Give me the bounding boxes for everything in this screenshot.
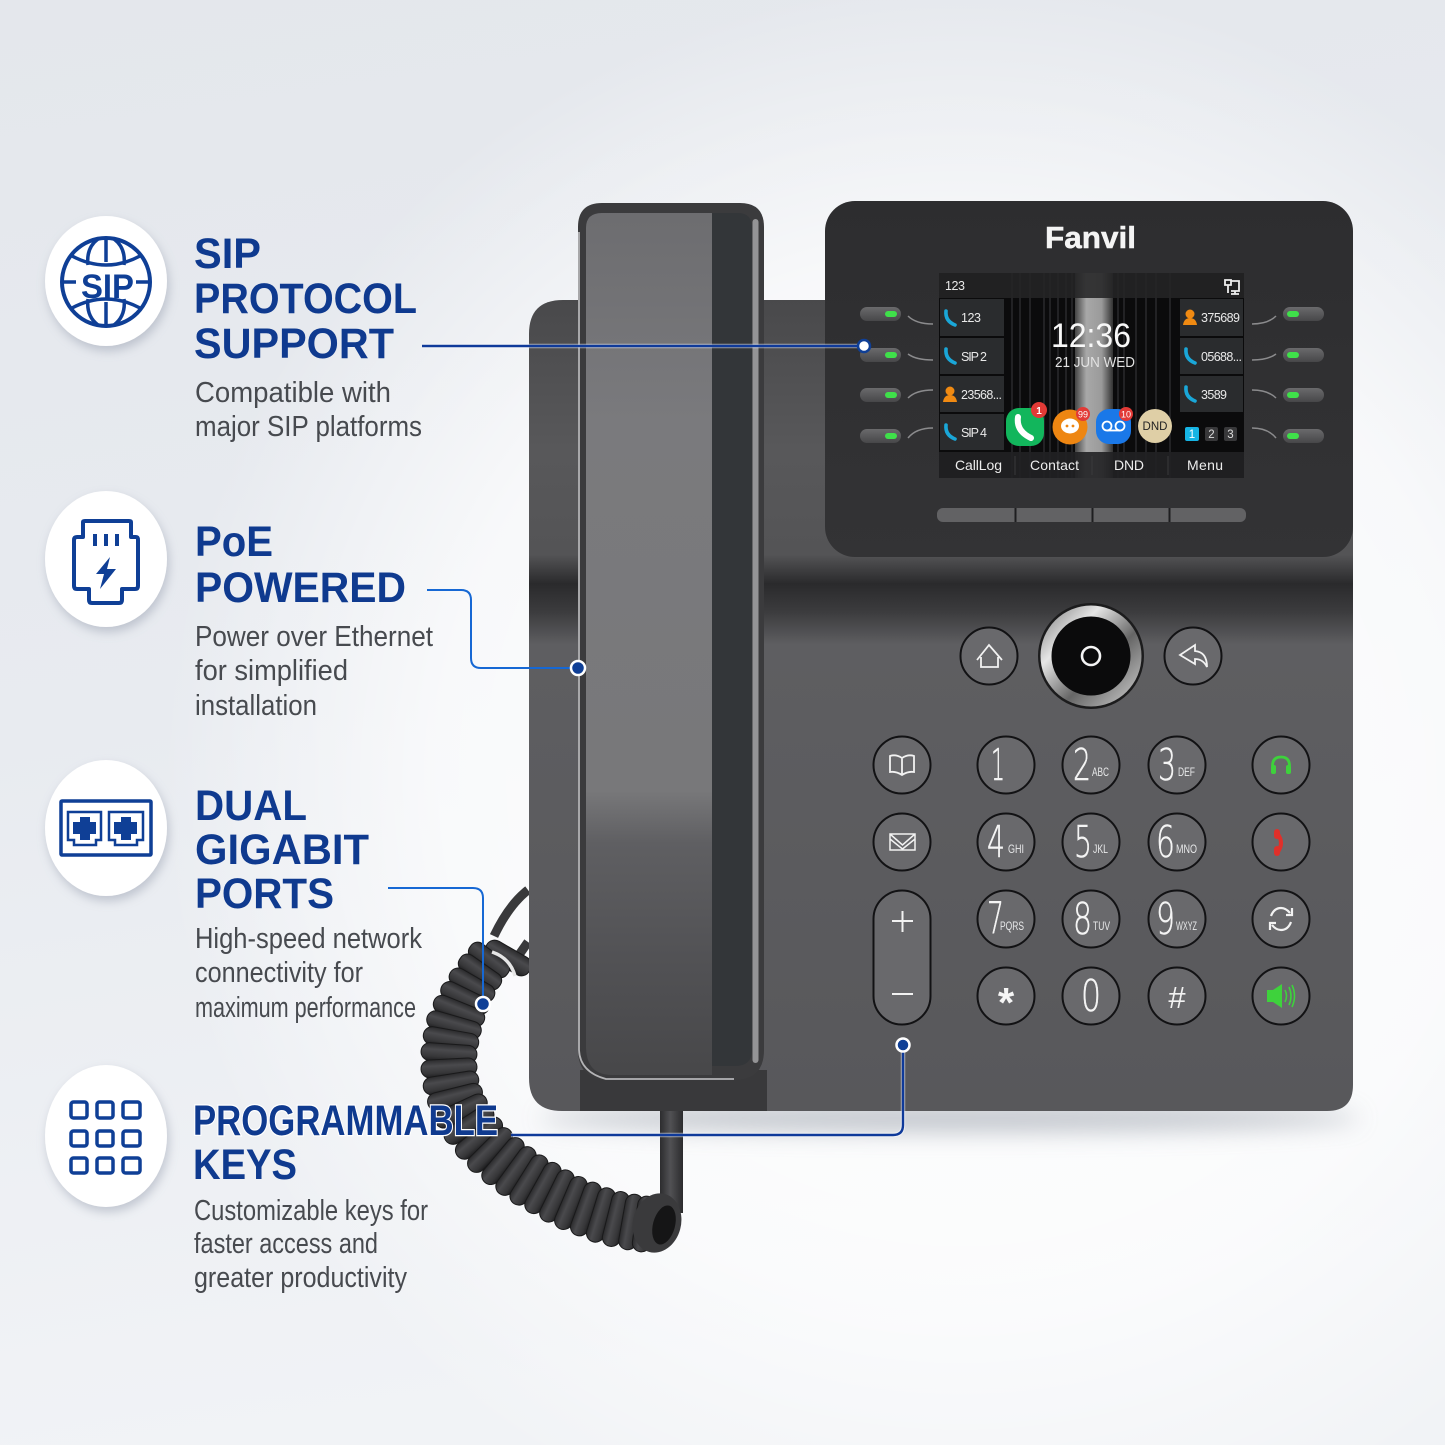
- description: for simplified: [195, 655, 348, 687]
- app icon: voicemail: 10: [1121, 410, 1131, 420]
- description: Customizable keys for: [194, 1195, 428, 1227]
- callout: SIP line: [422, 340, 870, 352]
- left speed-dial tiles: [940, 299, 1004, 450]
- app icon: messages: [1052, 407, 1090, 444]
- keypad digits: 2: [1073, 740, 1091, 791]
- page indicators: [1185, 427, 1237, 441]
- keypad digits: *: [998, 979, 1015, 1026]
- feature: dual gigabit ports: [195, 782, 422, 1024]
- soft key labels: DND: [1114, 457, 1144, 473]
- screen: 123: [945, 279, 965, 293]
- keypad digits: WXYZ: [1176, 919, 1197, 933]
- keypad digits: MNO: [1176, 842, 1197, 856]
- keypad digits: 6: [1156, 817, 1175, 868]
- keypad digits: GHI: [1008, 842, 1024, 856]
- description: [195, 377, 422, 443]
- coiled handset cord: [420, 890, 688, 1258]
- screen: [939, 273, 1244, 478]
- icon circle: keypad grid: [45, 1065, 167, 1207]
- left speed-dial tiles: 23568...: [961, 388, 1002, 402]
- phone shadow: [540, 1104, 1360, 1132]
- keypad digits: ABC: [1092, 765, 1109, 779]
- description: installation: [195, 690, 317, 722]
- icon: speaker: [1267, 984, 1294, 1008]
- icon: back: [1180, 645, 1207, 667]
- app icon: messages: 99: [1078, 410, 1088, 420]
- feature: SIP protocol support: [194, 230, 422, 443]
- keypad digits: DEF: [1178, 765, 1195, 779]
- icon circle: SIP globe: [45, 216, 167, 346]
- description: High-speed network: [195, 923, 422, 955]
- heading: GIGABIT: [195, 826, 369, 874]
- description: faster access and: [194, 1228, 378, 1260]
- keypad digits: #: [1168, 980, 1186, 1015]
- icon circle: dual ports: [45, 760, 167, 896]
- cradle shade under handset: [580, 1070, 767, 1111]
- head panel: [825, 201, 1353, 557]
- icon: book: [890, 755, 914, 775]
- brand logo: Fanvil: [1045, 220, 1136, 255]
- soft key labels: Menu: [1187, 457, 1223, 473]
- right speed-dial tiles: 375689: [1201, 311, 1240, 325]
- icon: volume plus and minus: [892, 911, 913, 994]
- right speed-dial tiles: 05688...: [1201, 350, 1242, 364]
- icon: redial: [1270, 908, 1292, 930]
- heading: PROTOCOL: [194, 275, 417, 323]
- app icon: DND: DND: [1143, 421, 1167, 433]
- heading: SIP: [194, 230, 261, 278]
- right speed-dial tiles: 3589: [1201, 388, 1227, 402]
- icon: hang up: [1274, 829, 1281, 856]
- app icon: DND: [1138, 409, 1172, 443]
- heading: DUAL: [195, 782, 307, 830]
- left speed-dial tiles: 123: [961, 311, 981, 325]
- icon circle: SIP globe: SIP: [81, 268, 134, 306]
- icon: headset: [1271, 757, 1291, 774]
- description: [195, 923, 422, 1024]
- keypad digits: 0: [1081, 971, 1101, 1022]
- heading: SUPPORT: [194, 320, 394, 368]
- heading: [194, 230, 417, 368]
- date: 21 JUN WED: [1055, 355, 1135, 371]
- base plate: [529, 300, 1353, 1111]
- left line keys: [860, 307, 933, 443]
- heading: [193, 1097, 498, 1189]
- description: greater productivity: [194, 1262, 407, 1294]
- left speed-dial tiles: SIP 2: [961, 350, 987, 364]
- app icon: phone: 1: [1036, 406, 1042, 417]
- keypad digits: 7: [987, 893, 1004, 944]
- keypad digits: 5: [1074, 817, 1092, 868]
- description: [195, 621, 433, 722]
- right line keys: [1252, 307, 1324, 443]
- page indicators: 3: [1227, 429, 1234, 441]
- keypad digits: TUV: [1093, 919, 1110, 933]
- icon circle: PoE connector: [45, 491, 167, 627]
- heading: [195, 518, 406, 612]
- soft key labels: CallLog: [955, 457, 1002, 473]
- page indicators: 2: [1208, 429, 1215, 441]
- keypad digits: 4: [987, 817, 1005, 868]
- soft key labels: Contact: [1030, 457, 1079, 473]
- app icon: phone: [1006, 402, 1047, 446]
- keypad digits: 1: [991, 740, 1005, 791]
- app icon: voicemail: [1096, 407, 1133, 444]
- description: major SIP platforms: [195, 411, 422, 443]
- feature: PoE powered: [195, 518, 433, 722]
- description: connectivity for: [195, 957, 363, 989]
- right speed-dial tiles: [1180, 299, 1243, 412]
- heading: PORTS: [195, 870, 334, 918]
- description: maximum performance: [195, 992, 416, 1024]
- soft key bar: [937, 508, 1246, 522]
- keypad digits: PQRS: [1000, 919, 1024, 933]
- navigation key: [1038, 603, 1144, 709]
- keypad: [874, 628, 1310, 1024]
- description: Power over Ethernet: [195, 621, 433, 653]
- soft key labels: [955, 456, 1223, 475]
- description: Compatible with: [195, 377, 391, 409]
- icon: home: [977, 645, 1002, 667]
- description: [194, 1195, 428, 1294]
- clock: 12:36: [1051, 317, 1131, 355]
- keypad digits: 9: [1156, 894, 1175, 945]
- heading: KEYS: [193, 1141, 297, 1189]
- feature: programmable keys: [193, 1097, 498, 1294]
- keypad digits: 8: [1073, 894, 1092, 945]
- heading: [195, 782, 369, 918]
- handset: [578, 203, 764, 1080]
- keypad digits: JKL: [1093, 842, 1108, 856]
- heading: PoE: [195, 518, 273, 566]
- keypad digits: 3: [1158, 740, 1176, 791]
- phone: [529, 201, 1353, 1111]
- page indicators: 1: [1189, 429, 1195, 441]
- callout: ports line: [388, 888, 490, 1011]
- heading: PROGRAMMABLE: [193, 1097, 498, 1145]
- callout: PoE line: [427, 590, 585, 675]
- heading: POWERED: [195, 564, 406, 612]
- keypad digits: [987, 740, 1197, 1026]
- callout: keys line: [511, 1038, 910, 1135]
- left speed-dial tiles: SIP 4: [961, 426, 987, 440]
- icon: mail: [890, 834, 915, 850]
